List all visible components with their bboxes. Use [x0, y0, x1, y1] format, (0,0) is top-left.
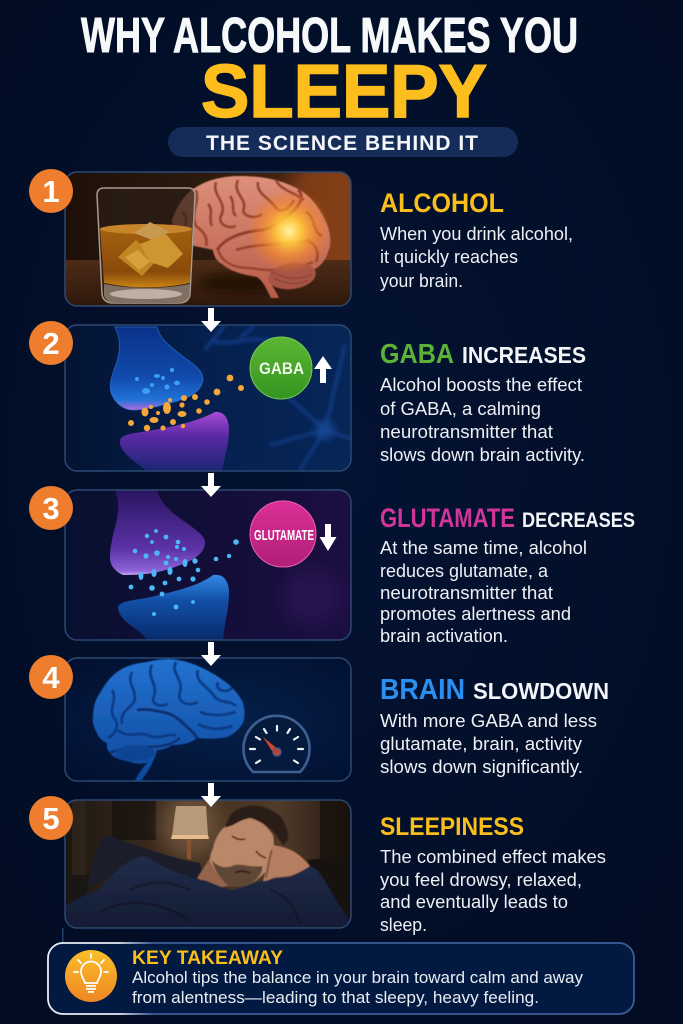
arrow: up [314, 356, 332, 383]
text block: alcohol: When you drink alcohol, [380, 224, 573, 244]
table [65, 260, 351, 306]
step number 1 [29, 169, 73, 213]
icon: whisky glass [97, 188, 195, 303]
text block: glutamate decreases: GLUTAMATE [380, 503, 515, 533]
lower synapse terminal [120, 412, 229, 471]
text block: alcohol: it quickly reaches [380, 247, 518, 267]
icon: light bulb [65, 950, 117, 1002]
upper synapse terminal [110, 327, 203, 410]
neuron background [205, 325, 355, 470]
GABA badge: GABA [259, 359, 304, 378]
panel: sleeping man image [65, 793, 351, 928]
panel border 1 [65, 172, 351, 306]
text block: sleepiness [380, 813, 606, 935]
panel: GABA synapse image [65, 325, 355, 471]
sleeping man [65, 806, 351, 928]
step number 3: 3 [42, 491, 60, 526]
text block: brain slowdown: BRAIN [380, 674, 465, 706]
panel: glutamate synapse image [102, 490, 350, 640]
step number 3 [29, 486, 73, 530]
text block: brain slowdown: slows down significantly. [380, 757, 583, 777]
text block: glutamate decreases: brain activation. [380, 626, 508, 646]
arrow: step 3 to 4 [201, 642, 221, 666]
step number 5 [29, 796, 73, 840]
icon: blue brain [93, 659, 244, 781]
callout: key takeaway: from alentness—leading to that sleepy, heavy feeling. [132, 989, 539, 1007]
text block: brain slowdown: With more GABA and less [380, 711, 597, 731]
callout: key takeaway: Alcohol tips the balance in your brain toward calm and away [132, 969, 584, 987]
subtitle pill [168, 127, 518, 157]
text block: alcohol: your brain. [380, 271, 463, 291]
text block: glutamate decreases: DECREASES [522, 509, 635, 532]
arrow: step 2 to 3 [201, 473, 221, 497]
text block: sleepiness: and eventually leads to [380, 892, 568, 912]
text block: alcohol: ALCOHOL [380, 188, 504, 218]
panel: blue brain and gauge image [65, 658, 351, 781]
step number 4: 4 [42, 660, 60, 695]
arrow: step 4 to 5 [201, 783, 221, 807]
text block: brain slowdown [380, 674, 609, 777]
arrow: step 1 to 2 [201, 308, 221, 332]
text block: GABA increases: INCREASES [462, 342, 586, 368]
icon: brain [172, 176, 331, 298]
text block: GABA increases: Alcohol boosts the effect [380, 375, 582, 395]
text block: brain slowdown: SLOWDOWN [473, 678, 609, 704]
panel border 3 [65, 490, 351, 640]
text block: sleepiness: The combined effect makes [380, 847, 606, 867]
step number 4 [29, 655, 73, 699]
lower synapse terminal [118, 575, 229, 640]
panel: alcohol and brain image [66, 172, 350, 306]
curtains and shadows [112, 800, 156, 840]
step number 2: 2 [42, 326, 60, 361]
text block: GABA increases: GABA [380, 338, 454, 369]
text block: glutamate decreases: At the same time, alcohol [380, 538, 587, 558]
step number 5: 5 [42, 801, 60, 836]
callout: key takeaway: KEY TAKEAWAY [132, 948, 283, 969]
text block: GABA increases: slows down brain activity. [380, 445, 585, 465]
glutamate badge [250, 501, 316, 567]
text block: GABA increases: of GABA, a calming [380, 399, 541, 419]
callout: key takeaway [48, 943, 634, 1014]
GABA badge [250, 337, 312, 399]
text block: glutamate decreases: promotes alertness and [380, 604, 571, 624]
text block: glutamate decreases: neurotransmitter that [380, 583, 553, 603]
text block: alcohol [380, 188, 573, 291]
panel border 5 [65, 800, 351, 928]
panel border 2 [65, 325, 351, 471]
neurotransmitter dots [129, 529, 239, 616]
text block: brain slowdown: glutamate, brain, activity [380, 734, 582, 754]
lamp [160, 793, 220, 859]
sofa back and cushions [308, 858, 350, 918]
icon: speed gauge [244, 716, 310, 772]
upper synapse terminal [110, 490, 205, 575]
glutamate badge: GLUTAMATE [254, 527, 314, 544]
text block: sleepiness: you feel drowsy, relaxed, [380, 870, 582, 890]
title [81, 9, 578, 133]
text block: GABA increases [380, 338, 586, 465]
text block: sleepiness: sleep. [380, 915, 427, 935]
step number 2 [29, 321, 73, 365]
text block: sleepiness: SLEEPINESS [380, 813, 524, 841]
text block: glutamate decreases [380, 503, 635, 646]
step number 1: 1 [42, 174, 60, 209]
text block: glutamate decreases: reduces glutamate, a [380, 561, 549, 581]
neurotransmitter dots [128, 375, 244, 431]
text block: GABA increases: neurotransmitter that [380, 422, 553, 442]
title: SLEEPY [201, 49, 487, 133]
arrow: down [320, 524, 336, 551]
panel border 4 [65, 658, 351, 781]
subtitle pill: THE SCIENCE BEHIND IT [206, 132, 478, 155]
